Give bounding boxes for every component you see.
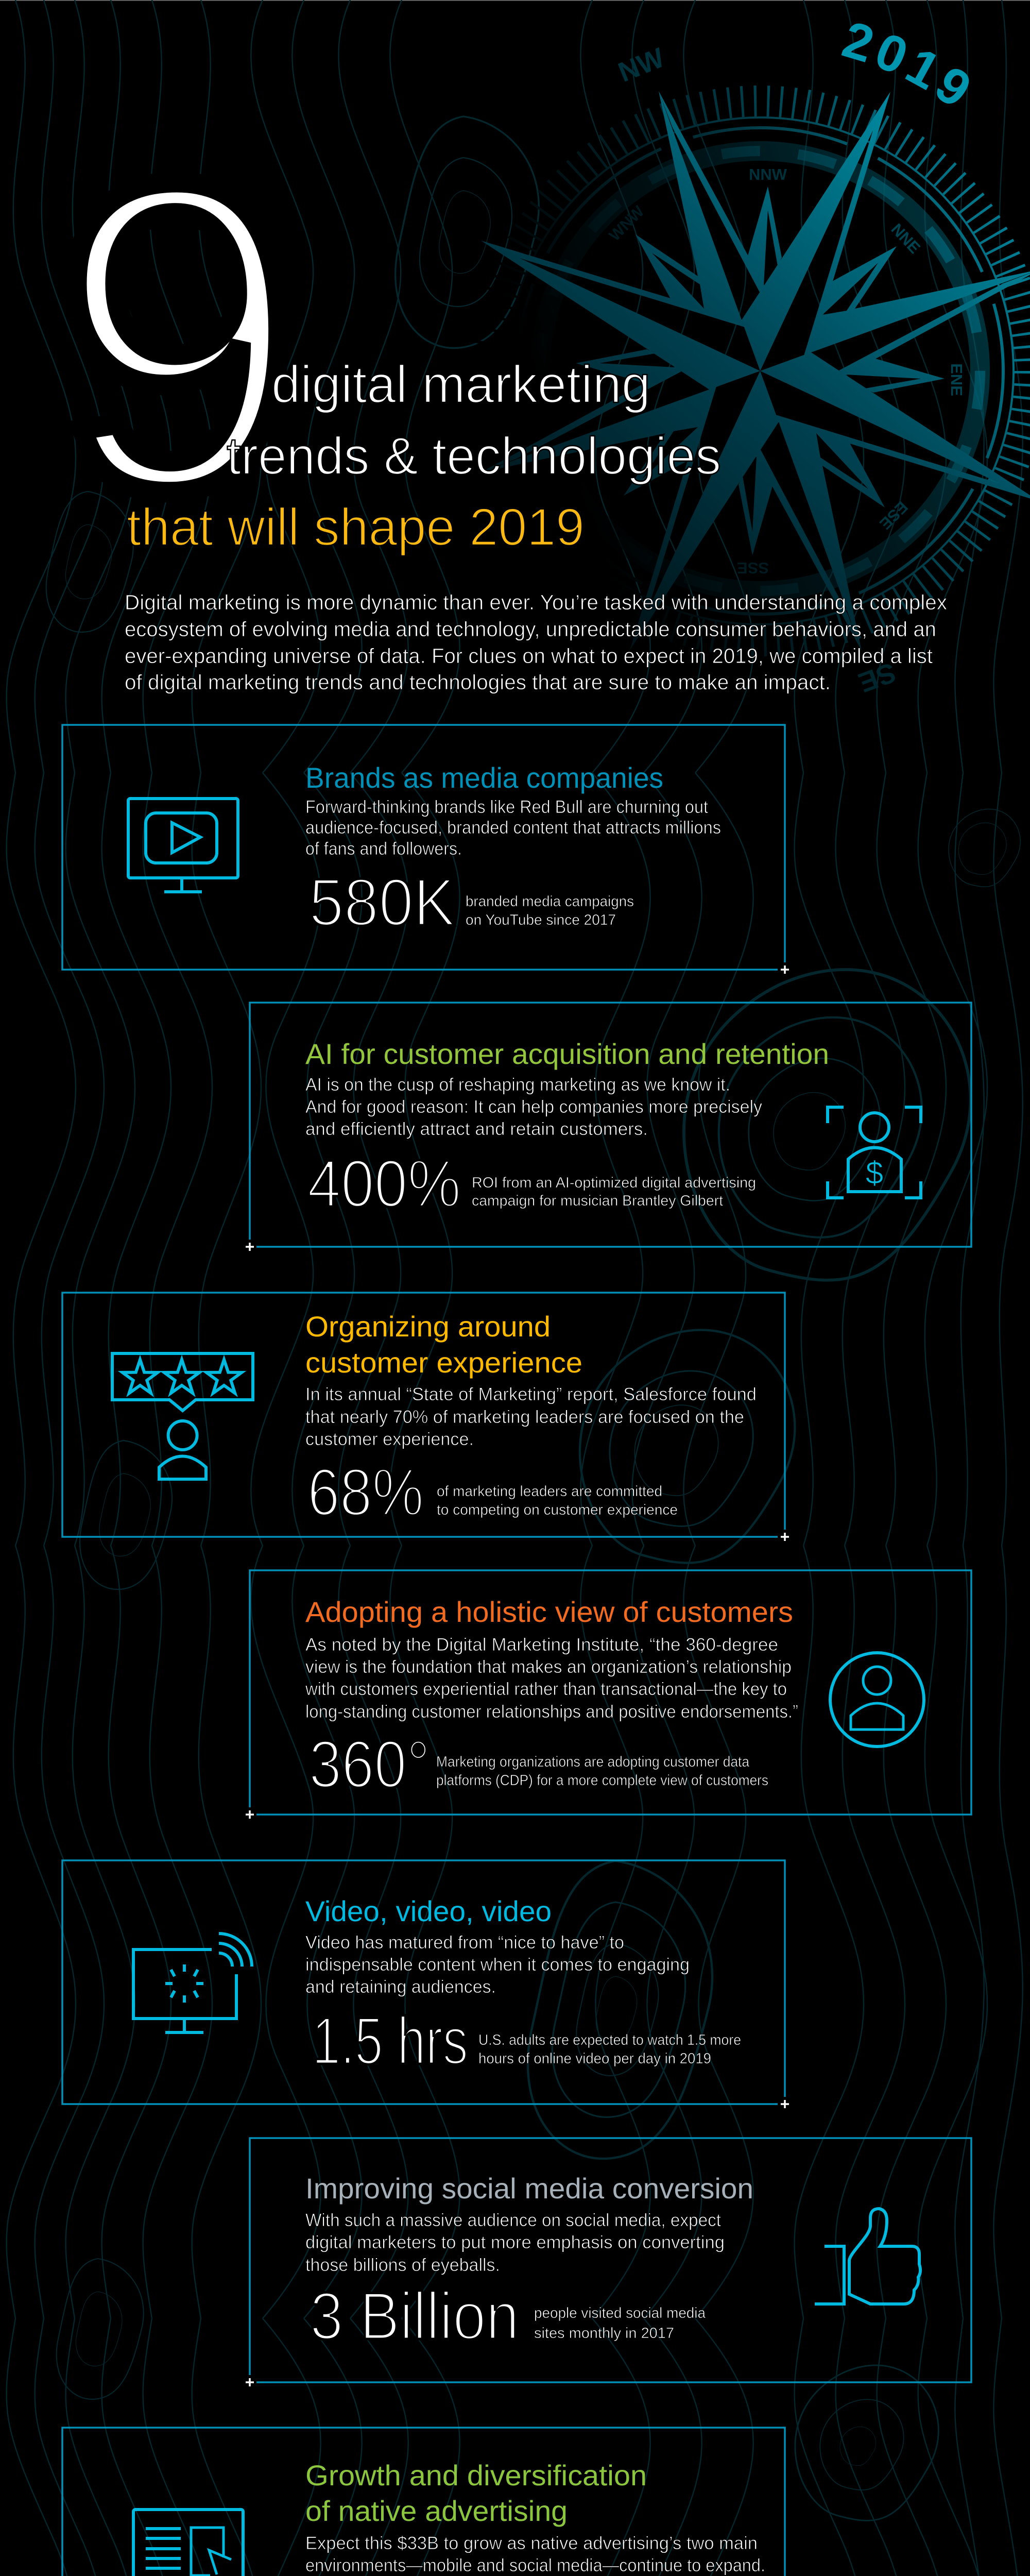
big number 9: 9 (56, 92, 299, 581)
heading (305, 1310, 582, 1379)
body text (305, 2210, 725, 2275)
body text (305, 1933, 690, 1997)
panel: brands as media companies (62, 725, 789, 974)
icon: star rating (112, 1353, 253, 1479)
stat: 1.5 hrs (312, 2003, 741, 2078)
stat: 400%: 400% (307, 1146, 461, 1221)
heading: Adopting a holistic view of customers (305, 1596, 793, 1628)
stat: 360 degrees: 360° (309, 1726, 430, 1802)
stat: 400% (307, 1146, 756, 1221)
body text: In its annual “State of Marketing” report, Salesforce found (305, 1384, 757, 1404)
stat: 360 degrees (309, 1726, 768, 1802)
body text: digital marketers to put more emphasis on converting (305, 2232, 725, 2252)
stat: 3 Billion (310, 2278, 706, 2353)
title: that will shape 2019 (127, 498, 585, 556)
icon: streaming monitor (133, 1934, 252, 2032)
panel: holistic view of customers (246, 1570, 971, 1819)
intro text (125, 590, 947, 694)
intro text: of digital marketing trends and technologies that are sure to make an impact. (125, 670, 831, 694)
stat: 68% (307, 1454, 678, 1530)
panel: social media conversion (246, 2138, 971, 2386)
body text (305, 1635, 798, 1722)
compass tick marks (490, 101, 1030, 641)
curved 2019 badge: 2019 (842, 24, 969, 104)
compass direction labels: SSE (737, 559, 769, 577)
title (127, 355, 721, 556)
body text: Video has matured from “nice to have” to (305, 1933, 624, 1953)
body text: Forward-thinking brands like Red Bull are churning out (305, 797, 708, 817)
heading: customer experience (305, 1346, 582, 1379)
title: digital marketing (271, 355, 650, 414)
body text: those billions of eyeballs. (305, 2255, 500, 2275)
body text (305, 1075, 762, 1139)
body text: of fans and followers. (305, 839, 462, 859)
intro text: ecosystem of evolving media and technology, unpredictable consumer behaviors, and an (125, 617, 936, 641)
icon: customer value: $ (866, 1156, 883, 1191)
stat: 580K: branded media campaigns (466, 893, 634, 910)
body text: long-standing customer relationships and positive endorsements.” (305, 1702, 798, 1722)
body text: with customers experiential rather than transactional—the key to (305, 1679, 787, 1699)
stat: 360 degrees: Marketing organizations are adopting customer data (436, 1754, 750, 1770)
body text: Expect this $33B to grow as native advertising’s two main (305, 2533, 758, 2553)
body text: AI is on the cusp of reshaping marketing as we know it. (305, 1075, 730, 1095)
compass illustration (464, 42, 1030, 698)
panel: organizing around customer experience (62, 1293, 789, 1541)
body text: As noted by the Digital Marketing Institute, “the 360-degree (305, 1635, 778, 1655)
body text (305, 2533, 765, 2575)
stat: 360 degrees: platforms (CDP) for a more complete view of customers (436, 1772, 768, 1789)
heading: AI for customer acquisition and retention (305, 1038, 829, 1070)
body text: and efficiently attract and retain customers. (305, 1119, 648, 1139)
stat: 1.5 hrs: hours of online video per day in 2019 (478, 2050, 711, 2067)
stat: 580K: 580K (309, 865, 455, 940)
body text: customer experience. (305, 1429, 474, 1449)
compass direction labels: WNW (606, 202, 648, 245)
compass direction labels (606, 42, 966, 698)
stat: 68%: of marketing leaders are committed (437, 1483, 662, 1500)
stat: 580K (309, 865, 634, 940)
title: trends & technologies (227, 427, 721, 485)
stat: 1.5 hrs: U.S. adults are expected to watch 1.5 more (478, 2032, 741, 2048)
body text: audience-focused, branded content that attracts millions (305, 818, 721, 838)
heading: Growth and diversification (305, 2459, 647, 2492)
heading: Brands as media companies (305, 761, 663, 794)
heading: Video, video, video (305, 1895, 552, 1927)
icon: customer value (828, 1107, 921, 1198)
compass direction labels: NNW (749, 165, 787, 183)
compass rose star (464, 77, 1030, 670)
compass direction labels: SE (854, 656, 900, 698)
stat: 68%: 68% (307, 1454, 424, 1530)
body text (305, 1384, 757, 1449)
intro text: ever-expanding universe of data. For clues on what to expect in 2019, we compiled a list (125, 644, 933, 668)
compass direction labels: ESE (876, 498, 912, 533)
body text: indispensable content when it comes to engaging (305, 1955, 690, 1975)
stat: 3 Billion: 3 Billion (310, 2278, 519, 2353)
stat: 580K: on YouTube since 2017 (466, 912, 616, 928)
compass rings (507, 117, 1014, 624)
stat: 400%: ROI from an AI-optimized digital advertising (472, 1175, 756, 1191)
panel: native advertising (62, 2428, 789, 2576)
compass direction labels: ENE (948, 363, 966, 396)
compass direction labels: NNE (888, 220, 924, 257)
panel: video (62, 1860, 789, 2108)
body text: With such a massive audience on social media, expect (305, 2210, 721, 2230)
panel: AI for customer acquisition (246, 1003, 971, 1251)
heading: Organizing around (305, 1310, 551, 1343)
icon: thumbs up (815, 2209, 920, 2304)
heading: Improving social media conversion (305, 2172, 753, 2205)
stat: 1.5 hrs: 1.5 hrs (312, 2003, 468, 2078)
body text: that nearly 70% of marketing leaders are focused on the (305, 1407, 744, 1427)
icon: customer in circle (830, 1653, 924, 1747)
compass direction labels: NW (614, 42, 668, 88)
body text: and retaining audiences. (305, 1977, 496, 1997)
stat: 400%: campaign for musician Brantley Gilbert (472, 1193, 723, 1209)
body text: And for good reason: It can help companies more precisely (305, 1097, 762, 1117)
stat: 68%: to competing on customer experience (437, 1502, 678, 1518)
icon: video monitor (128, 799, 238, 892)
body text: environments—mobile and social media—continue to expand. (305, 2555, 765, 2575)
stat: 3 Billion: sites monthly in 2017 (534, 2325, 674, 2342)
icon: native ad monitor (133, 2510, 243, 2576)
stat: 3 Billion: people visited social media (534, 2305, 706, 2321)
heading: of native advertising (305, 2495, 568, 2527)
body text (305, 797, 721, 859)
heading (305, 2459, 647, 2527)
intro text: Digital marketing is more dynamic than ever. You’re tasked with understanding a complex (125, 590, 947, 614)
body text: view is the foundation that makes an organization’s relationship (305, 1657, 792, 1677)
